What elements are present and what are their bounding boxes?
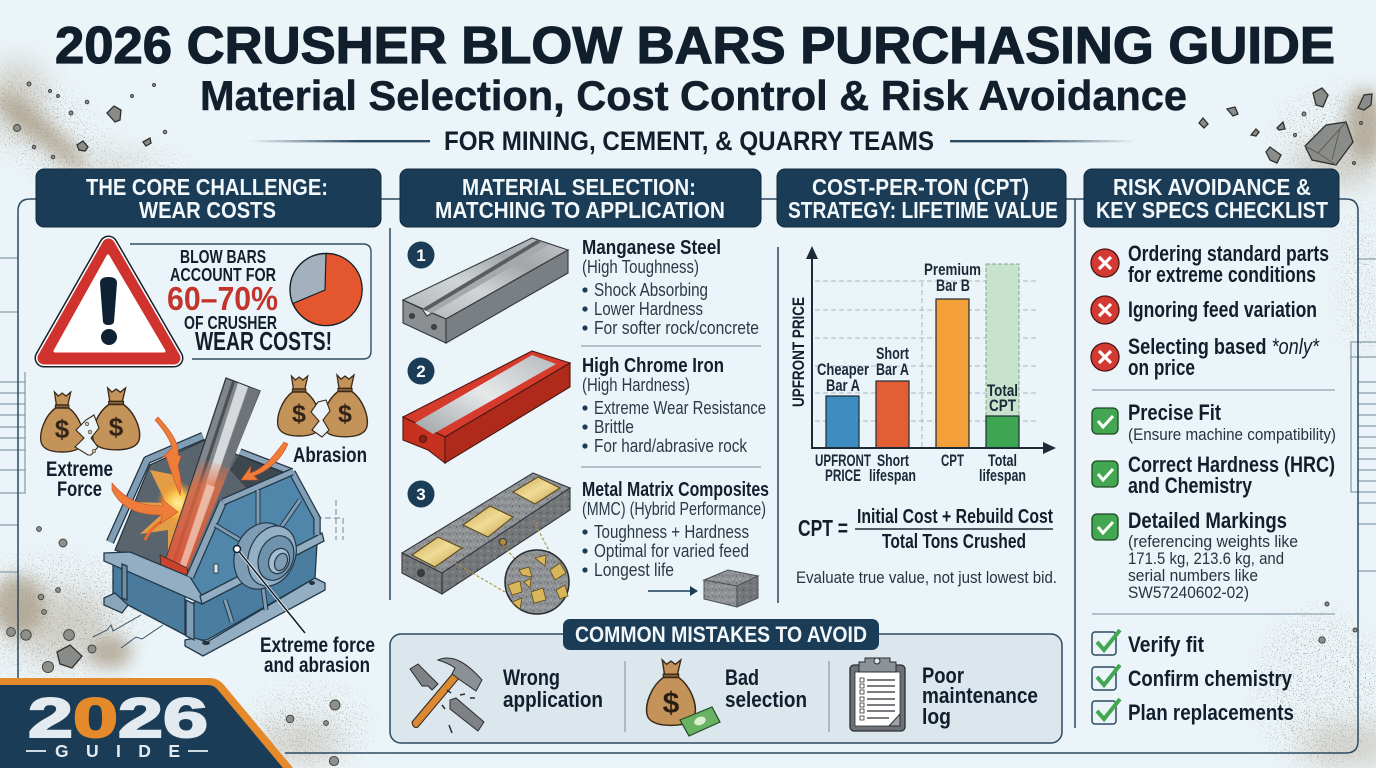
check: confirm chemistry xyxy=(1092,665,1292,691)
bearing housing xyxy=(224,514,305,598)
crusher housing xyxy=(104,472,325,656)
label: extreme force xyxy=(46,458,113,501)
icon: money bag with cash: $ xyxy=(663,687,680,720)
label: abrasion: Abrasion xyxy=(293,444,367,467)
force arrows xyxy=(112,417,288,524)
callout: wear cost share: BLOW BARS xyxy=(180,246,266,267)
text: poor maintenance log: log xyxy=(922,704,951,729)
impact burst xyxy=(134,470,200,552)
axis labels: lifespan xyxy=(869,467,916,485)
axes xyxy=(806,246,1056,454)
heading: cost-per-ton: STRATEGY: LIFETIME VALUE xyxy=(788,197,1058,223)
risk 1: standard parts xyxy=(1091,241,1329,287)
callout: wear cost share: WEAR COSTS! xyxy=(195,326,332,356)
axis labels: Total xyxy=(988,452,1017,470)
formula: cpt: CPT = xyxy=(798,515,848,541)
axis labels xyxy=(815,452,1026,485)
item 3: metal matrix composites xyxy=(402,473,769,614)
number 3: 3 xyxy=(416,485,426,504)
text: metal matrix composites: Metal Matrix Composites xyxy=(582,478,769,501)
text: wrong application: application xyxy=(503,687,603,712)
text: metal matrix composites: Optimal for varied feed xyxy=(594,540,749,561)
text: manganese steel: For softer rock/concrete xyxy=(594,317,759,338)
arrow to sample block xyxy=(648,586,698,596)
risk 3: price only: on price xyxy=(1128,355,1195,380)
text: high chrome iron xyxy=(582,354,766,456)
axis labels: Short xyxy=(877,452,909,470)
main panel frame xyxy=(18,199,1358,753)
number 2 xyxy=(408,358,434,384)
label: extreme force: Extreme xyxy=(46,458,113,481)
note: evaluate true value: Evaluate true value, not just lowest bid. xyxy=(796,568,1057,587)
text: manganese steel: Shock Absorbing xyxy=(594,279,708,300)
icon: warning triangle xyxy=(44,245,174,358)
spec 3: detailed markings xyxy=(1092,508,1298,602)
heading: core challenge: WEAR COSTS xyxy=(139,197,276,223)
icon: torn money bags right xyxy=(278,375,367,437)
text: manganese steel xyxy=(582,236,759,338)
bar: premium bar b xyxy=(936,299,969,448)
bar labels: Short xyxy=(876,345,909,363)
heading: cost-per-ton xyxy=(777,169,1066,227)
spec 3: detailed markings: Detailed Markings xyxy=(1128,508,1287,533)
heading: material selection: MATCHING TO APPLICATION xyxy=(435,197,725,223)
cracks under crusher xyxy=(93,615,163,648)
formula: cpt: Total Tons Crushed xyxy=(882,530,1026,553)
check: confirm chemistry: Confirm chemistry xyxy=(1128,666,1292,691)
bar labels: Total xyxy=(987,382,1018,400)
heading: core challenge: THE CORE CHALLENGE: xyxy=(86,174,328,200)
bar labels: CPT xyxy=(989,397,1016,415)
formula: cpt xyxy=(798,505,1053,553)
spec 1: precise fit xyxy=(1092,400,1336,444)
illustration: impact crusher xyxy=(104,378,325,656)
heading: risk avoidance: RISK AVOIDANCE & xyxy=(1113,174,1311,200)
icon: torn money bags right: $ xyxy=(292,400,306,428)
bar labels: Premium xyxy=(924,261,981,279)
callout leader: extreme force and abrasion xyxy=(234,546,375,677)
risk 3: price only xyxy=(1091,334,1320,380)
text: manganese steel: (High Toughness) xyxy=(582,256,699,277)
text: metal matrix composites xyxy=(582,478,769,580)
badge: 2026 guide: GUIDE xyxy=(55,741,180,761)
axis labels: PRICE xyxy=(825,467,861,485)
icon: hammer and broken bar xyxy=(410,658,484,733)
heading: risk avoidance: KEY SPECS CHECKLIST xyxy=(1096,197,1328,223)
text: metal matrix composites: Longest life xyxy=(594,559,674,580)
icon: composite block xyxy=(704,570,758,607)
text: manganese steel: Manganese Steel xyxy=(582,236,721,259)
bar labels: Bar B xyxy=(936,277,970,295)
illustration: manganese bar xyxy=(403,238,568,343)
bar labels: Bar A xyxy=(826,377,860,395)
callout: wear cost share xyxy=(130,244,371,359)
icon: torn money bags left xyxy=(41,388,140,455)
risk 3: price only: Selecting based *only* xyxy=(1128,334,1320,359)
illustration: high chrome bar xyxy=(403,351,570,463)
formula: cpt: Initial Cost + Rebuild Cost xyxy=(857,505,1053,528)
pie chart xyxy=(290,253,362,326)
icon: money bag with cash xyxy=(647,660,720,736)
spec 1: precise fit: Precise Fit xyxy=(1128,400,1221,425)
number 3 xyxy=(408,480,434,508)
text: metal matrix composites: Toughness + Hardness xyxy=(594,521,749,542)
icon: torn money bags left: $ xyxy=(55,414,70,444)
spec 2: hardness and chemistry: and Chemistry xyxy=(1128,473,1252,498)
check: verify fit: Verify fit xyxy=(1128,632,1204,657)
illustration: composite bar xyxy=(402,473,570,614)
heading: material selection xyxy=(400,169,761,227)
text: wrong application xyxy=(503,665,603,712)
icon: torn money bags left: $ xyxy=(109,412,124,442)
text: high chrome iron: High Chrome Iron xyxy=(582,354,724,377)
text: bad selection xyxy=(725,665,807,712)
callout: wear cost share: 60–70% xyxy=(167,281,278,318)
number 1 xyxy=(408,242,434,268)
icon: clipboard xyxy=(850,658,905,731)
spec 3: detailed markings: SW57240602-02) xyxy=(1128,583,1249,602)
bar labels: Cheaper xyxy=(817,361,869,379)
risk 2: feed variation: Ignoring feed variation xyxy=(1128,297,1317,322)
bar: total cpt xyxy=(986,416,1019,448)
check: verify fit xyxy=(1092,630,1204,657)
axis labels: UPFRONT xyxy=(815,452,871,470)
text: high chrome iron: Brittle xyxy=(594,416,634,437)
blueprint background lines xyxy=(0,258,1376,572)
spec 2: hardness and chemistry xyxy=(1092,452,1335,498)
rock: large top right xyxy=(1305,122,1353,165)
heading: core challenge xyxy=(36,169,381,227)
text: manganese steel: Lower Hardness xyxy=(594,298,703,319)
text: high chrome iron: Extreme Wear Resistance xyxy=(594,397,766,418)
panel: common mistakes xyxy=(390,619,1062,743)
badge: 2026 guide xyxy=(0,678,293,768)
label: extreme force: Force xyxy=(57,478,102,501)
item 2: high chrome iron xyxy=(403,351,766,463)
bar labels: Bar A xyxy=(876,361,909,379)
icon: torn money bags right: $ xyxy=(338,400,352,428)
axis labels: lifespan xyxy=(979,467,1026,485)
check: plan replacements xyxy=(1092,699,1294,725)
heading: cost-per-ton: COST-PER-TON (CPT) xyxy=(812,174,1029,200)
spec 3: detailed markings: serial numbers like xyxy=(1128,566,1258,585)
text: poor maintenance log: Poor xyxy=(922,663,964,688)
heading: risk avoidance xyxy=(1084,169,1339,227)
blow bar xyxy=(160,378,260,578)
audience tagline: FOR MINING, CEMENT, & QUARRY TEAMS xyxy=(444,126,934,156)
axis title: UPFRONT PRICE xyxy=(789,297,808,407)
risk 2: feed variation xyxy=(1091,296,1317,324)
callout: wear cost share: ACCOUNT FOR xyxy=(170,264,276,285)
title: 2026 CRUSHER BLOW BARS PURCHASING GUIDE xyxy=(55,17,1335,75)
bar: cheaper bar a xyxy=(826,396,859,448)
bar chart xyxy=(789,246,1056,485)
text: bad selection: selection xyxy=(725,687,807,712)
text: metal matrix composites: (MMC) (Hybrid Performance) xyxy=(582,498,766,519)
bar: short bar a xyxy=(876,381,909,448)
heading: material selection: MATERIAL SELECTION: xyxy=(462,174,696,200)
check: plan replacements: Plan replacements xyxy=(1128,700,1294,725)
text: poor maintenance log: maintenance xyxy=(922,683,1038,708)
spec 3: detailed markings: (referencing weights like xyxy=(1128,532,1298,551)
callout leader: extreme force and abrasion: Extreme force xyxy=(260,634,375,657)
number 1: 1 xyxy=(416,246,426,265)
bar labels xyxy=(817,261,1018,415)
panel: material selection xyxy=(400,169,769,614)
text: high chrome iron: (High Hardness) xyxy=(582,374,690,395)
text: high chrome iron: For hard/abrasive rock xyxy=(594,435,748,456)
text: bad selection: Bad xyxy=(725,665,759,690)
badge: 2026 guide: 2026 xyxy=(28,686,208,749)
item 1: manganese steel xyxy=(403,236,759,343)
panel: the core challenge xyxy=(36,169,381,677)
text: wrong application: Wrong xyxy=(503,665,560,690)
axis labels: CPT xyxy=(941,452,964,470)
panel: risk avoidance checklist xyxy=(1084,169,1339,725)
panel: cost-per-ton strategy xyxy=(777,169,1066,587)
number 2: 2 xyxy=(416,362,426,381)
text: poor maintenance log xyxy=(922,663,1038,729)
risk 1: standard parts: for extreme conditions xyxy=(1128,262,1316,287)
spec 1: precise fit: (Ensure machine compatibility) xyxy=(1128,425,1336,444)
heading: common mistakes: COMMON MISTAKES TO AVOID xyxy=(575,622,867,647)
subtitle: Material Selection, Cost Control & Risk Avoidance xyxy=(200,72,1187,119)
callout: wear cost share: OF CRUSHER xyxy=(184,312,277,333)
spec 3: detailed markings: 171.5 kg, 213.6 kg, and xyxy=(1128,549,1284,568)
callout leader: extreme force and abrasion: and abrasion xyxy=(264,654,370,677)
